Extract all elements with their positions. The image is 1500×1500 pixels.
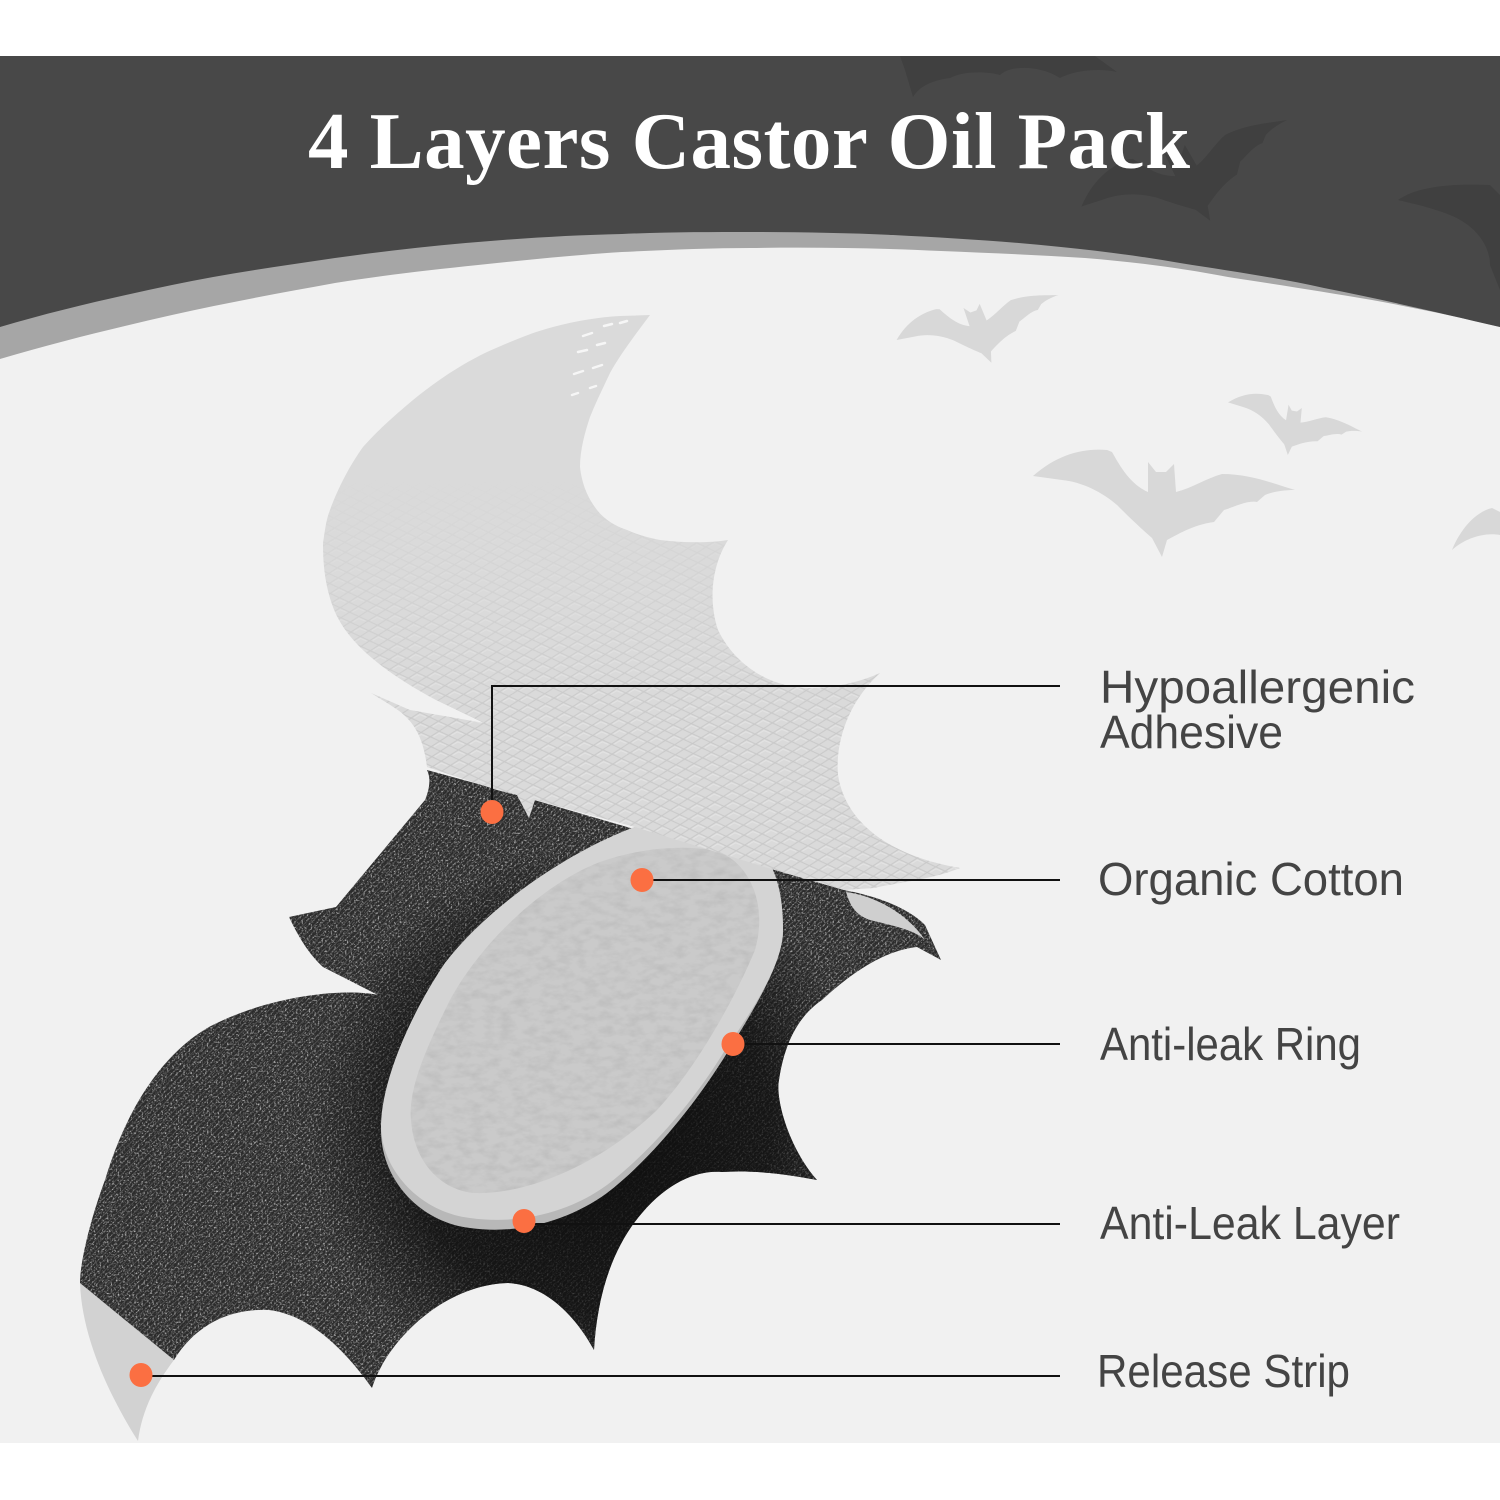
background bats (891, 271, 1500, 557)
label: Anti-Leak Layer: Anti-Leak Layer (1100, 1197, 1400, 1249)
leader lines (141, 686, 1060, 1376)
hypoallergenic adhesive sheet (310, 310, 970, 900)
release strip layer (80, 1283, 174, 1441)
organic cotton felt (410, 848, 759, 1193)
panel: grey curved band (0, 56, 1500, 359)
title: 4 Layers Castor Oil Pack (308, 96, 1190, 186)
label: Organic Cotton: Organic Cotton (1098, 853, 1404, 905)
label: Anti-leak Ring: Anti-leak Ring (1100, 1018, 1361, 1070)
anti-leak ring pad (381, 825, 783, 1230)
perforation highlights (572, 321, 627, 395)
fabric layer: black bat (70, 760, 950, 1400)
panel: dark header (0, 56, 1500, 327)
label: Hypoallergenic Adhesive (1100, 661, 1415, 758)
curled strip on right wing (846, 892, 925, 940)
header bat silhouettes (967, 72, 1490, 256)
marker dots (130, 800, 744, 1387)
label: Hypoallergenic Adhesive: Adhesive (1100, 706, 1283, 758)
label: Hypoallergenic Adhesive: Hypoallergenic (1100, 661, 1415, 713)
label: Release Strip: Release Strip (1097, 1345, 1350, 1397)
